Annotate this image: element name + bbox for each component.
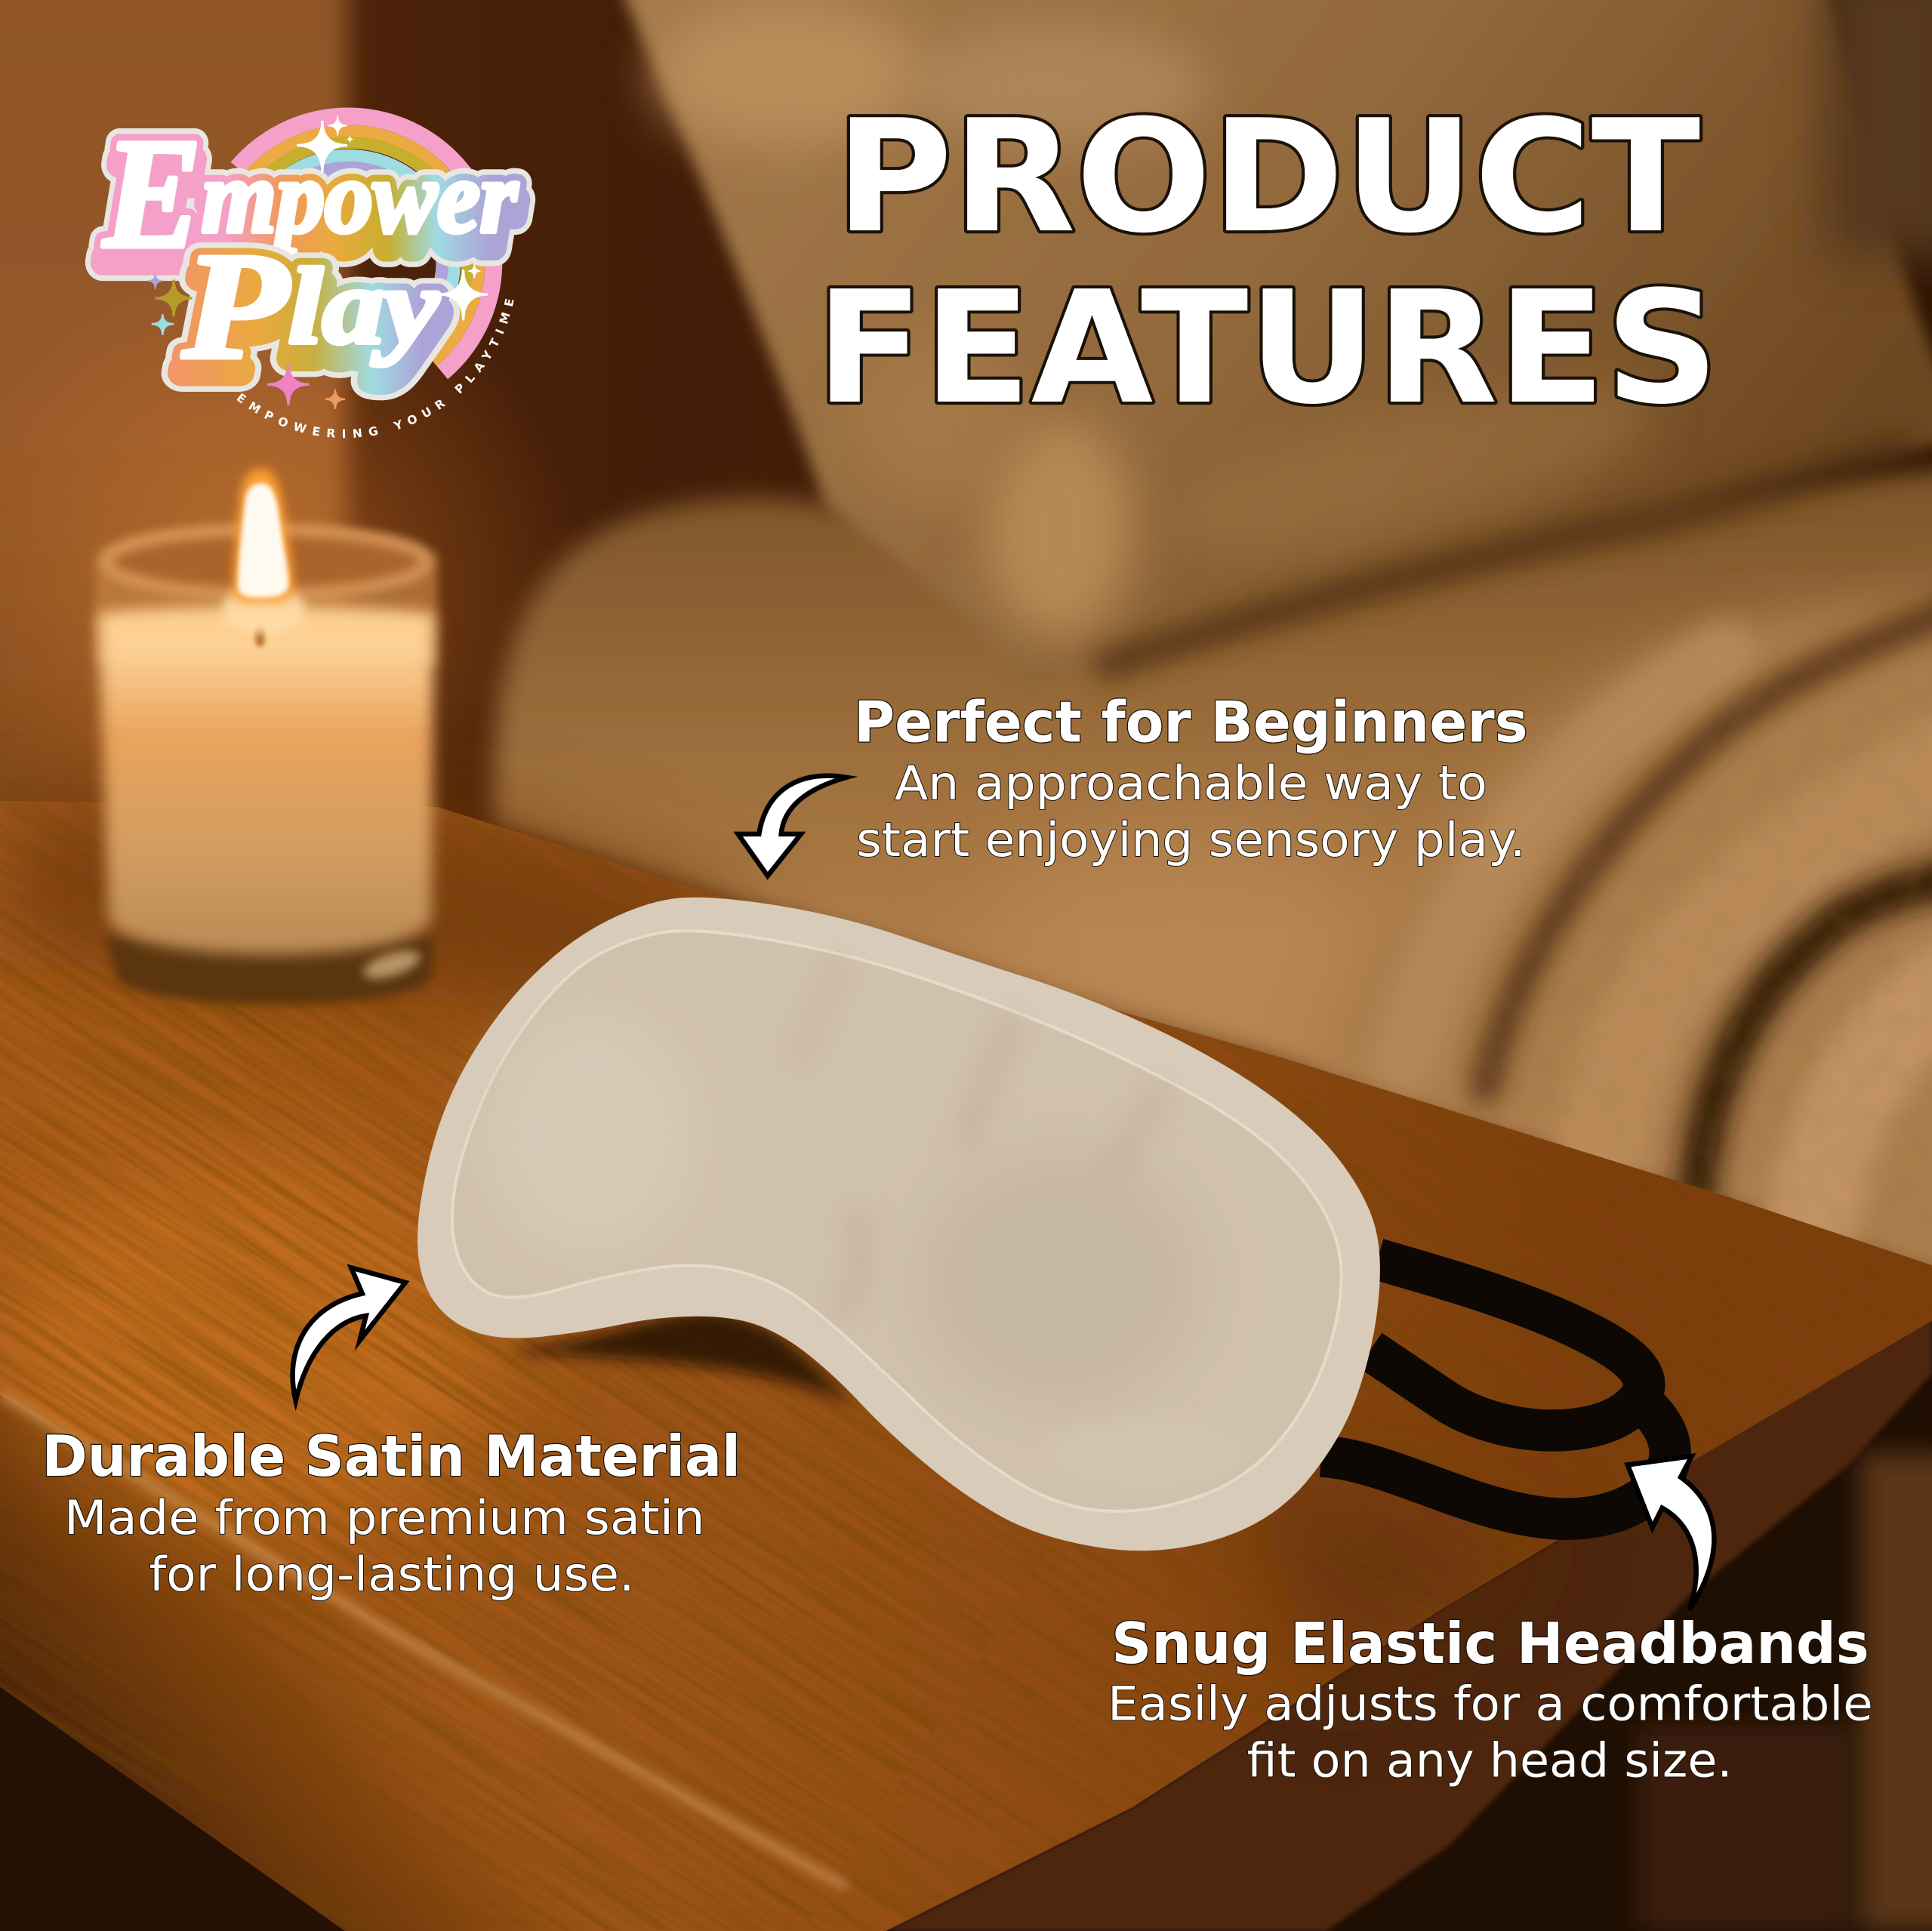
title: PRODUCT FEATURES — [815, 87, 1719, 439]
title: PRODUCT FEATURES: FEATURES — [815, 258, 1719, 439]
blanket grooves — [1485, 604, 1932, 1185]
logo word: Empower: mpower — [202, 140, 519, 254]
callout: Snug Elastic Headbands: fit on any head size. — [1247, 1732, 1733, 1788]
table right darkening — [1232, 1454, 1556, 1700]
candle — [95, 468, 437, 1004]
table front face — [0, 1394, 886, 1931]
mask outer rim — [419, 899, 1378, 1549]
wick — [255, 624, 265, 647]
logo word: Empower: mpower — [202, 140, 519, 254]
bright table edge highlight — [0, 1394, 846, 1887]
logo word: Empower: E — [102, 106, 202, 281]
logo tagline: EMPOWERING YOUR PLAYTIME — [237, 299, 513, 438]
logo word: Play: lay — [288, 247, 439, 367]
floor shadow below table — [0, 1686, 345, 1931]
callout: Snug Elastic Headbands: Snug Elastic Headbands — [1111, 1610, 1869, 1677]
pillow bottom shadow — [1109, 450, 1897, 665]
table top — [0, 801, 1932, 1931]
callout: Durable Satin Material — [42, 1423, 741, 1602]
candle glow on wall — [0, 259, 594, 924]
logo word: Play: lay — [288, 263, 439, 383]
glass base — [105, 936, 433, 1004]
throw pillow — [610, 0, 1932, 690]
wood grain — [0, 801, 1932, 1930]
table side face — [886, 1306, 1932, 1931]
logo word: Play: lay — [288, 247, 439, 367]
logo word: Empower: mpower — [202, 156, 519, 270]
callout: Perfect for Beginners: start enjoying sensory play. — [856, 812, 1525, 867]
logo word: Play: P — [181, 237, 289, 406]
logo word: Empower: mpower — [202, 140, 519, 254]
arrow: to mask top — [738, 776, 846, 876]
callout: Snug Elastic Headbands — [1108, 1610, 1873, 1788]
arrow: to mask left edge — [293, 1267, 405, 1401]
logo word: Empower: E — [102, 123, 202, 297]
arrow: to elastic headband — [1628, 1456, 1714, 1610]
callout: Durable Satin Material: Made from premium satin — [64, 1490, 705, 1545]
warm light pool — [12, 1158, 505, 1528]
rainbow logo: Empower Play — [85, 106, 536, 438]
pillow folds and light patches — [653, 0, 1932, 665]
callout: Perfect for Beginners — [854, 688, 1528, 867]
logo word: Play: lay — [288, 263, 439, 383]
logo word: Empower: E — [102, 106, 202, 281]
glass rim — [106, 530, 427, 594]
wax body — [99, 606, 433, 955]
callout: Durable Satin Material: Durable Satin Material — [42, 1423, 741, 1489]
callout: Snug Elastic Headbands: Easily adjusts for a comfortable — [1108, 1676, 1873, 1731]
warm left wall — [0, 0, 347, 875]
mask inner panel — [452, 931, 1342, 1511]
callout: Perfect for Beginners: An approachable way to — [895, 756, 1487, 811]
logo word: Play: lay — [288, 247, 439, 367]
logo word: Play: P — [181, 221, 289, 390]
logo word: Play: P — [181, 221, 289, 390]
logo word: Play — [181, 221, 439, 406]
elastic straps — [1321, 1259, 1670, 1519]
flame — [222, 468, 306, 634]
table leg and back furniture — [1639, 1454, 1932, 1930]
title: PRODUCT FEATURES: PRODUCT — [836, 87, 1700, 267]
eye mask with elastic straps — [419, 899, 1670, 1549]
logo word: Play: P — [181, 237, 289, 406]
sofa body — [493, 468, 1932, 1281]
callout: Durable Satin Material: for long-lasting use. — [149, 1547, 634, 1602]
mask shadow — [517, 1310, 850, 1404]
logo word: Empower: E — [102, 123, 202, 297]
knit blanket — [1306, 598, 1932, 1287]
dark wall column — [0, 0, 1932, 1232]
sofa warm lights — [986, 825, 1380, 1047]
blanket ribs — [1404, 653, 1932, 1220]
logo sparkles — [148, 115, 488, 409]
knit speckle — [1454, 628, 1932, 1269]
callout: Perfect for Beginners: Perfect for Beginners — [854, 688, 1528, 755]
logo word: Empower: E — [102, 106, 202, 281]
logo word: Empower: mpower — [202, 156, 519, 270]
dark back of table — [0, 801, 739, 1023]
rainbow arcs — [237, 116, 494, 373]
mask satin shading — [487, 967, 1244, 1485]
logo word: Play: P — [181, 221, 289, 390]
logo word: Empower — [102, 106, 519, 297]
glass upper — [95, 525, 437, 665]
